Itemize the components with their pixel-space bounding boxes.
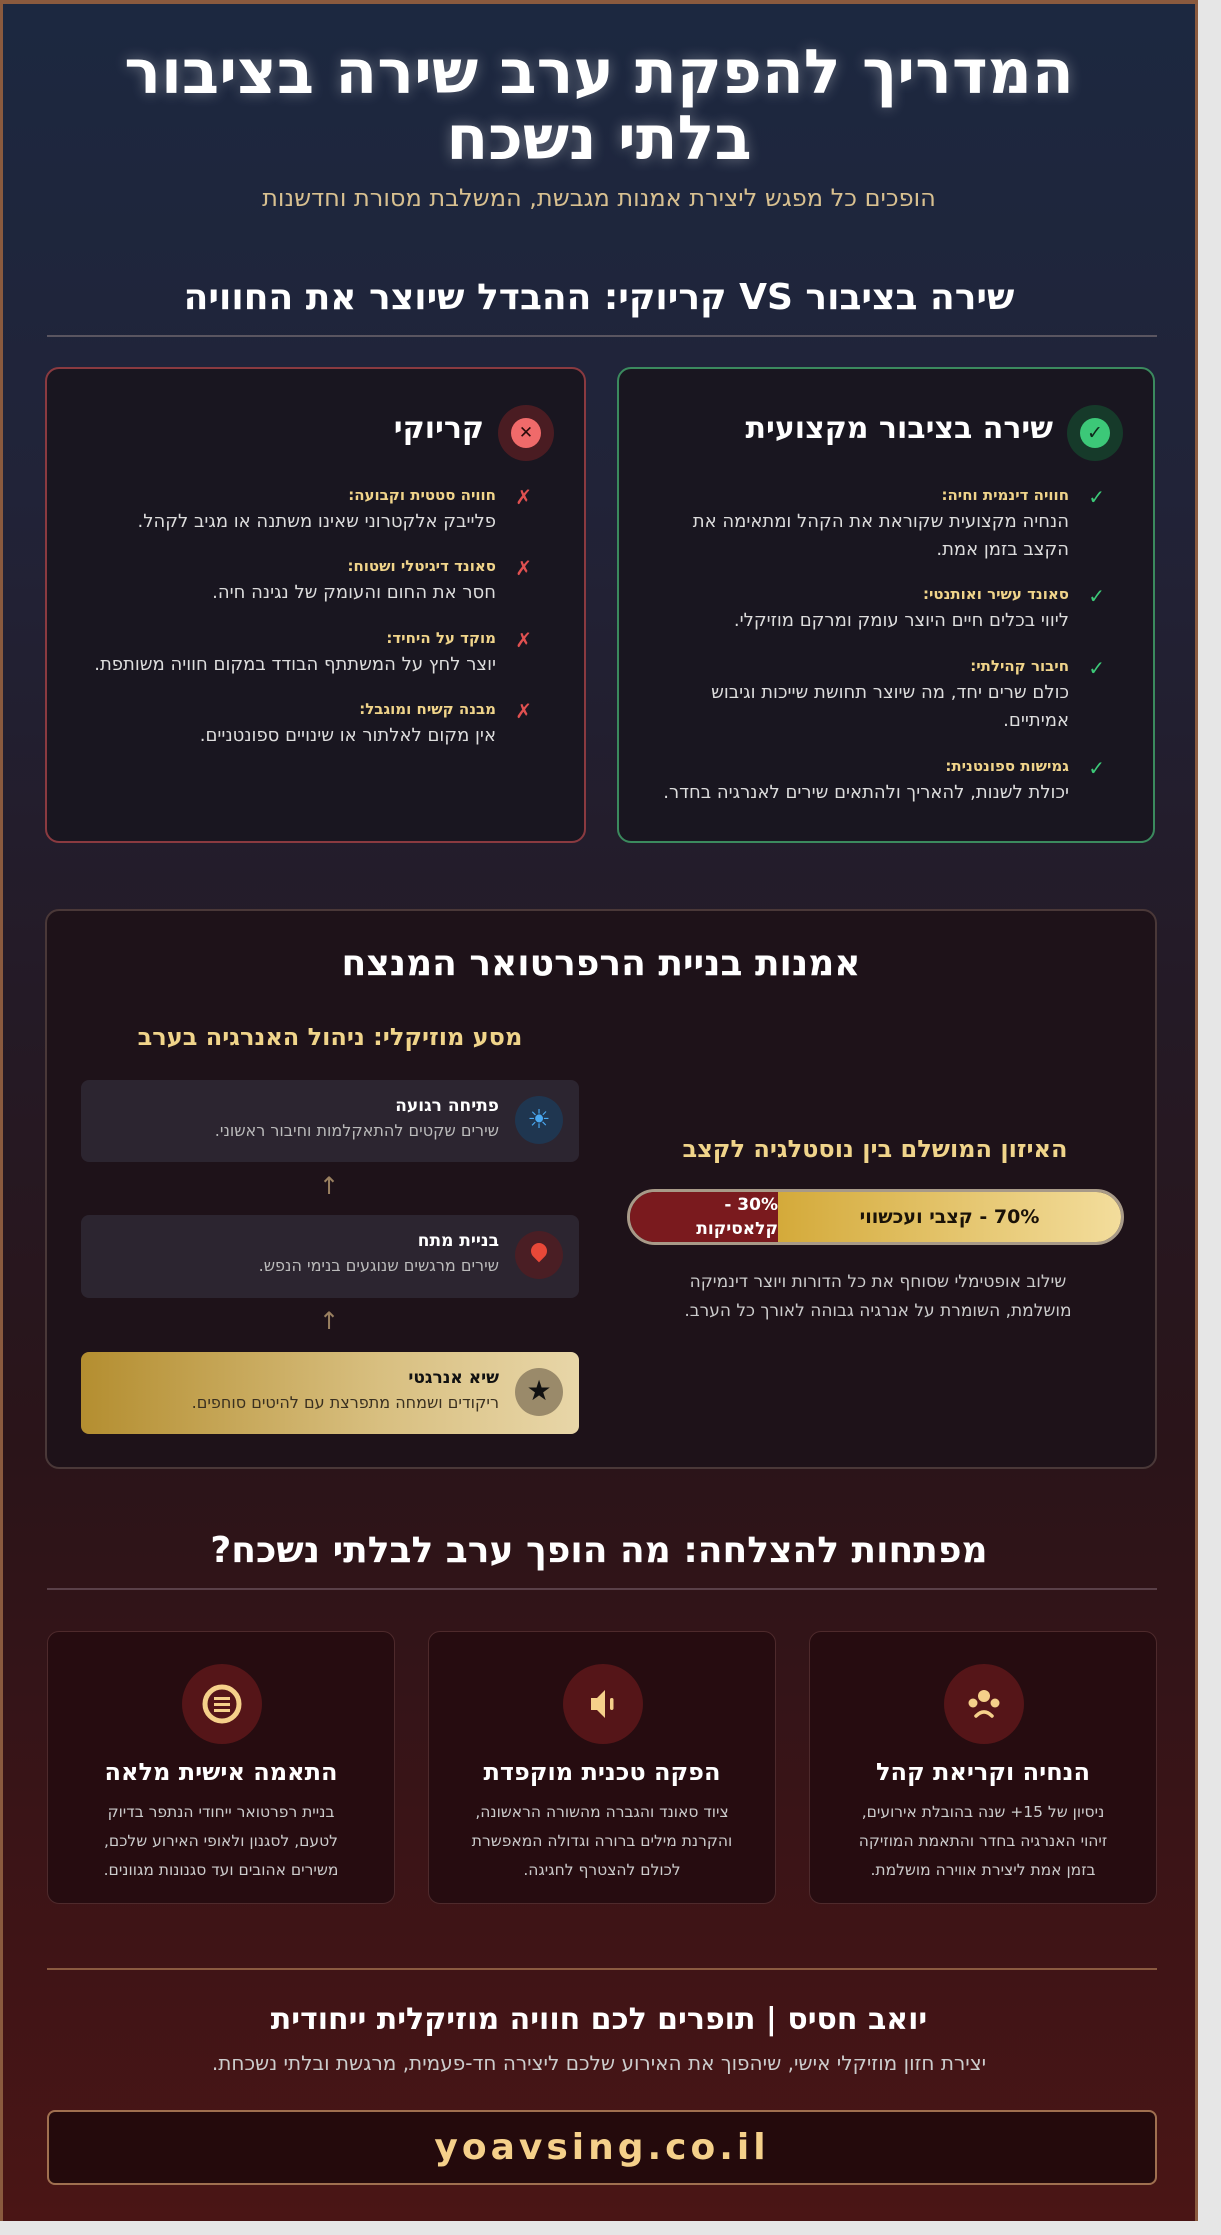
panel: professional singing: גמישות ספונטנית: bbox=[945, 757, 1069, 775]
icon: x: ✕ bbox=[519, 423, 533, 443]
subheading: musical journey: מסע מוזיקלי: ניהול האנרגיה בערב bbox=[138, 1023, 522, 1051]
panel: professional singing: ✓ bbox=[1088, 656, 1105, 680]
panel: professional singing: כולם שרים יחד, מה שיוצר תחושת שייכות וגיבוש אמיתיים. bbox=[711, 682, 1069, 731]
panel: karaoke: חסר את החום והעומק של נגינה חיה. bbox=[212, 582, 496, 603]
footer title: יואב חסיס | תופרים לכם חוויה מוזיקלית ייחודית bbox=[271, 2002, 927, 2037]
card: production bbox=[428, 1631, 776, 1904]
panel: karaoke: מבנה קשיח ומוגבל: bbox=[359, 700, 496, 718]
panel: professional singing: ✓ bbox=[1088, 584, 1105, 608]
stage: tension bbox=[81, 1215, 579, 1298]
stage: peak: שיא אנרגטי bbox=[408, 1368, 499, 1388]
items: ✗ bbox=[515, 485, 532, 509]
panel: karaoke: אין מקום לאלתור או שינויים ספונטניים. bbox=[200, 725, 496, 746]
icon: sun: ☀ bbox=[527, 1105, 551, 1135]
stage: opening: שירים שקטים להתאקלמות וחיבור ראשוני. bbox=[215, 1121, 499, 1140]
icon: drop bbox=[515, 1231, 563, 1279]
stage: tension: בניית מתח bbox=[418, 1231, 499, 1251]
card: audience: ניסיון של 15+ שנה בהובלת אירועים, זיהוי האנרגיה בחדר והתאמת המוזיקה בזמן אמת ליצירת אווירה מושלמת. bbox=[859, 1803, 1107, 1879]
bar chart: 70/30: קלאסיקות bbox=[696, 1219, 778, 1239]
footer text: יצירת חזון מוזיקלי אישי, שיהפוך את האירוע שלכם ליצירה חד-פעמית, מרגשת ובלתי נשכחת. bbox=[212, 2051, 986, 2075]
panel: professional singing: חיבור קהילתי: bbox=[970, 657, 1069, 675]
subtitle: הופכים כל מפגש ליצירת אמנות מגבשת, המשלבת מסורת וחדשנות bbox=[262, 184, 936, 212]
icon: check bbox=[1067, 405, 1123, 461]
panel: professional singing: חוויה דינמית וחיה: bbox=[942, 486, 1069, 504]
icon: list bbox=[182, 1664, 262, 1744]
panel: professional singing: ✓ bbox=[1088, 756, 1105, 780]
panel: karaoke: ✗ bbox=[515, 556, 532, 580]
subheading: balance: האיזון המושלם בין נוסטלגיה לקצב bbox=[682, 1135, 1068, 1163]
stage: opening: פתיחה רגועה bbox=[395, 1096, 499, 1116]
panel: professional singing: יכולת לשנות, להאריך ולהתאים שירים לאנרגיה בחדר. bbox=[663, 782, 1069, 803]
card: personalization: התאמה אישית מלאה bbox=[105, 1758, 337, 1786]
title bbox=[124, 37, 1076, 174]
heading: keys to success: מפתחות להצלחה: מה הופך ערב לבלתי נשכח? bbox=[210, 1530, 988, 1571]
panel: karaoke bbox=[45, 367, 586, 843]
panel: karaoke: פלייבק אלקטרוני שאינו משתנה או מגיב לקהל. bbox=[138, 511, 496, 532]
text: balance description: שילוב אופטימלי שסוחף את כל הדורות ויוצר דינמיקה מושלמת, השומרת על אנרגיה גבוהה לאורך כל הערב. bbox=[684, 1272, 1072, 1321]
panel: repertoire bbox=[45, 909, 1157, 1469]
arrow: ↑ bbox=[319, 1307, 339, 1335]
panel: professional singing: ליווי בכלים חיים היוצר עומק ומרקם מוזיקלי. bbox=[734, 610, 1069, 631]
stage: tension: שירים מרגשים שנוגעים בנימי הנפש. bbox=[259, 1256, 499, 1275]
bar chart: 70/30: 30% - bbox=[724, 1195, 778, 1215]
card: production: ציוד סאונד והגברה מהשורה הראשונה, והקרנת מילים ברורה וגדולה המאפשרת לכולם להצטרף לחגיגה. bbox=[472, 1803, 732, 1879]
panel: karaoke: מוקד על היחיד: bbox=[386, 629, 496, 647]
icon: x bbox=[498, 405, 554, 461]
icon: speaker bbox=[563, 1664, 643, 1744]
panel: karaoke: סאונד דיגיטלי ושטוח: bbox=[347, 557, 496, 575]
card title: שירה בציבור מקצועית bbox=[746, 411, 1053, 446]
panel: karaoke: ✗ bbox=[515, 699, 532, 723]
heading: comparison: שירה בציבור VS קריוקי: ההבדל שיוצר את החוויה bbox=[184, 277, 1014, 318]
panel: professional singing: סאונד עשיר ואותנטי: bbox=[923, 585, 1069, 603]
arrow: ↑ bbox=[319, 1172, 339, 1200]
heading: אמנות בניית הרפרטואר המנצח bbox=[342, 943, 860, 984]
bar chart: 70/30: 70% - קצבי ועכשווי bbox=[860, 1206, 1039, 1228]
stage: peak: ריקודים ושמחה מתפרצת עם להיטים סוחפים. bbox=[192, 1393, 499, 1412]
icon: check: ✓ bbox=[1087, 422, 1103, 444]
items: ✓ bbox=[1088, 485, 1105, 509]
title: בלתי נשכח bbox=[446, 103, 752, 174]
stage: opening bbox=[81, 1080, 579, 1162]
icon: star bbox=[515, 1368, 563, 1416]
panel: professional singing bbox=[617, 367, 1155, 843]
card title: קריוקי bbox=[394, 411, 484, 446]
panel: karaoke: ✗ bbox=[515, 628, 532, 652]
title: המדריך להפקת ערב שירה בציבור bbox=[124, 37, 1074, 108]
icon: star: ★ bbox=[526, 1374, 552, 1407]
card: audience bbox=[809, 1631, 1157, 1904]
icon: sun bbox=[515, 1096, 563, 1144]
panel: karaoke: יוצר לחץ על המשתתף הבודד במקום חוויה משותפת. bbox=[94, 654, 496, 675]
panel: karaoke: חוויה סטטית וקבועה: bbox=[348, 486, 496, 504]
url box: yoavsing.co.il bbox=[434, 2127, 770, 2168]
card: personalization: בניית רפרטואר ייחודי הנתפר בדיוק לטעם, לסגנון ולאופי האירוע שלכם, משירים אהובים ועד סגנונות מגוונים. bbox=[104, 1803, 338, 1879]
url box bbox=[47, 2110, 1157, 2185]
card: audience: הנחיה וקריאת קהל bbox=[876, 1758, 1090, 1786]
card: personalization bbox=[47, 1631, 395, 1904]
card: production: הפקה טכנית מוקפדת bbox=[484, 1758, 720, 1786]
stage: peak bbox=[81, 1352, 579, 1434]
icon: people bbox=[944, 1664, 1024, 1744]
bar chart: 70/30 bbox=[627, 1189, 1124, 1245]
panel: professional singing: הנחיה מקצועית שקוראת את הקהל ומתאימה את הקצב בזמן אמת. bbox=[693, 511, 1069, 560]
